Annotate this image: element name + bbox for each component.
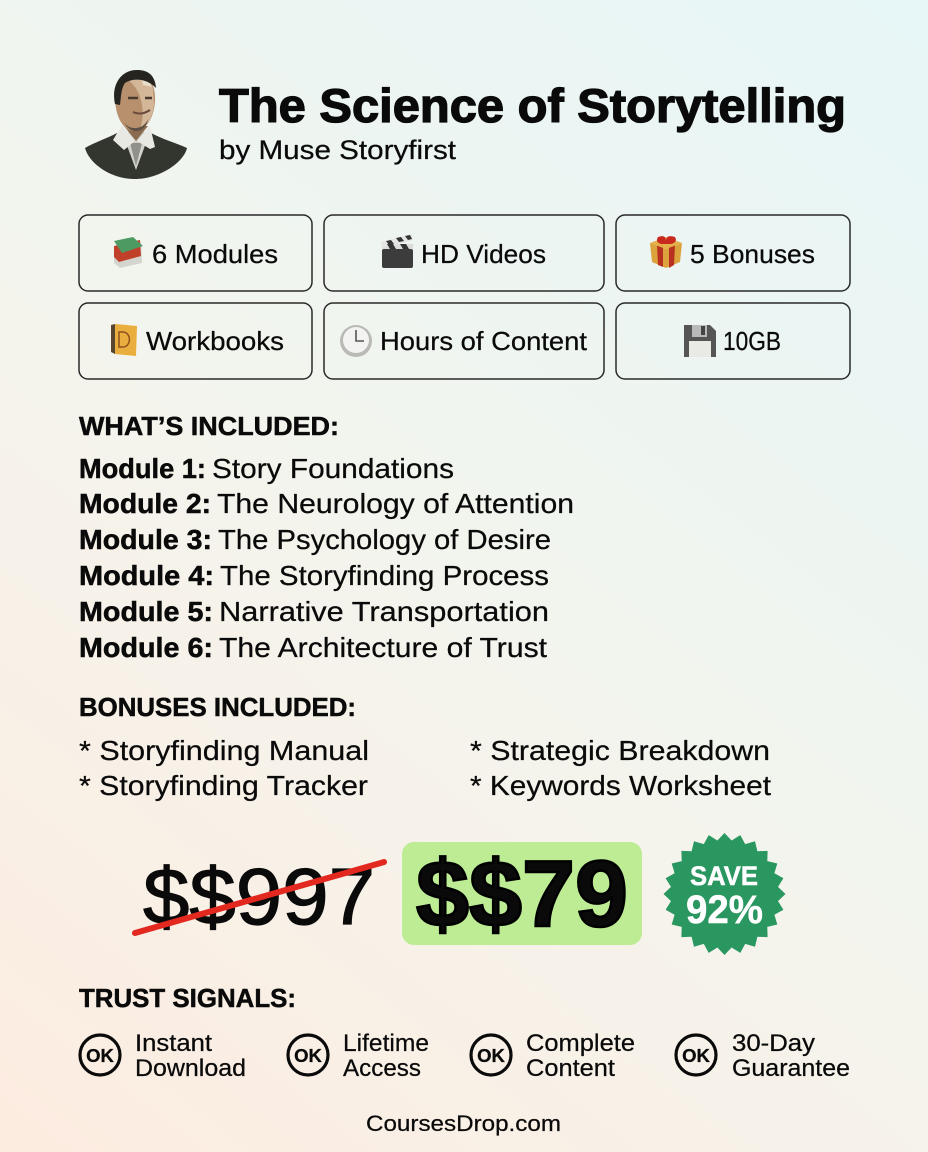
feature tile: Hours of Content (324, 303, 604, 379)
trust signal: 30-day guarantee (676, 1030, 850, 1082)
heading: bonuses included: BONUSES INCLUDED: (79, 692, 356, 722)
feature tile: HD Videos: HD Videos (421, 239, 546, 269)
trust signal: lifetime access (288, 1030, 429, 1082)
new price: $$79 (416, 841, 628, 946)
trust signal: instant download: Instant (135, 1030, 212, 1057)
heading: what's included: WHAT’S INCLUDED: (79, 411, 339, 441)
module list: Module 4: (79, 560, 214, 591)
module list: The Neurology of Attention (217, 488, 574, 519)
strikethrough (135, 862, 384, 933)
feature tile: 10GB: 10GB (723, 326, 781, 356)
trust signal: 30-day guarantee: Guarantee (732, 1055, 850, 1082)
module list: Module 2: (79, 488, 211, 519)
module list: Module 5: (79, 596, 213, 627)
module list: Story Foundations (212, 453, 454, 484)
trust signal: instant download (80, 1030, 246, 1082)
bonus list: * Storyfinding Tracker (79, 770, 368, 801)
subtitle: by Muse Storyfirst (219, 135, 457, 165)
feature tile: HD Videos (324, 215, 604, 291)
trust signal: complete content: OK (477, 1045, 506, 1066)
save badge: SAVE (690, 861, 758, 891)
icon: floppy disk (684, 325, 716, 357)
trust signal: lifetime access: Lifetime (343, 1030, 429, 1057)
trust signal: complete content: Complete (526, 1030, 635, 1057)
feature tile: 6 Modules (79, 215, 312, 291)
icon: gift box (650, 236, 682, 268)
old price: $$997 (143, 852, 375, 941)
trust signal: complete content (471, 1030, 635, 1082)
heading: trust signals: TRUST SIGNALS: (79, 983, 296, 1013)
bonus list: * Storyfinding Manual (79, 735, 369, 766)
module list: The Psychology of Desire (218, 524, 551, 555)
feature tile: 5 Bonuses: 5 Bonuses (690, 239, 815, 269)
bonus list (79, 735, 771, 801)
feature tile: Workbooks: Workbooks (146, 326, 284, 356)
module list: The Architecture of Trust (219, 632, 547, 663)
save badge (664, 833, 786, 955)
module list: Narrative Transportation (219, 596, 549, 627)
bonus list: * Keywords Worksheet (470, 770, 771, 801)
feature tile: 6 Modules: 6 Modules (152, 239, 278, 269)
icon: clapperboard (381, 234, 413, 268)
trust signal: lifetime access: OK (294, 1045, 323, 1066)
trust signal: 30-day guarantee: 30-Day (732, 1030, 815, 1057)
module list: Module 1: (79, 453, 206, 484)
icon: books (114, 237, 143, 268)
save badge: 92% (686, 888, 763, 932)
trust signal: complete content: Content (526, 1055, 615, 1082)
icon: clock (340, 325, 372, 357)
title: The Science of Storytelling (219, 79, 846, 132)
icon: author portrait (85, 70, 187, 179)
module list: Module 6: (79, 632, 213, 663)
trust signal: instant download: OK (86, 1045, 115, 1066)
bonus list: * Strategic Breakdown (470, 735, 770, 766)
footer: CoursesDrop.com (366, 1111, 561, 1136)
trust signal: lifetime access: Access (343, 1055, 421, 1082)
feature tile: 5 Bonuses (616, 215, 850, 291)
feature tile: Workbooks (79, 303, 312, 379)
module list (79, 453, 574, 663)
module list: Module 3: (79, 524, 212, 555)
feature tile: Hours of Content: Hours of Content (380, 326, 588, 356)
icon: notebook (111, 324, 137, 356)
feature tile: 10GB (616, 303, 850, 379)
trust signal: 30-day guarantee: OK (682, 1045, 711, 1066)
trust signal: instant download: Download (135, 1055, 246, 1082)
module list: The Storyfinding Process (220, 560, 549, 591)
